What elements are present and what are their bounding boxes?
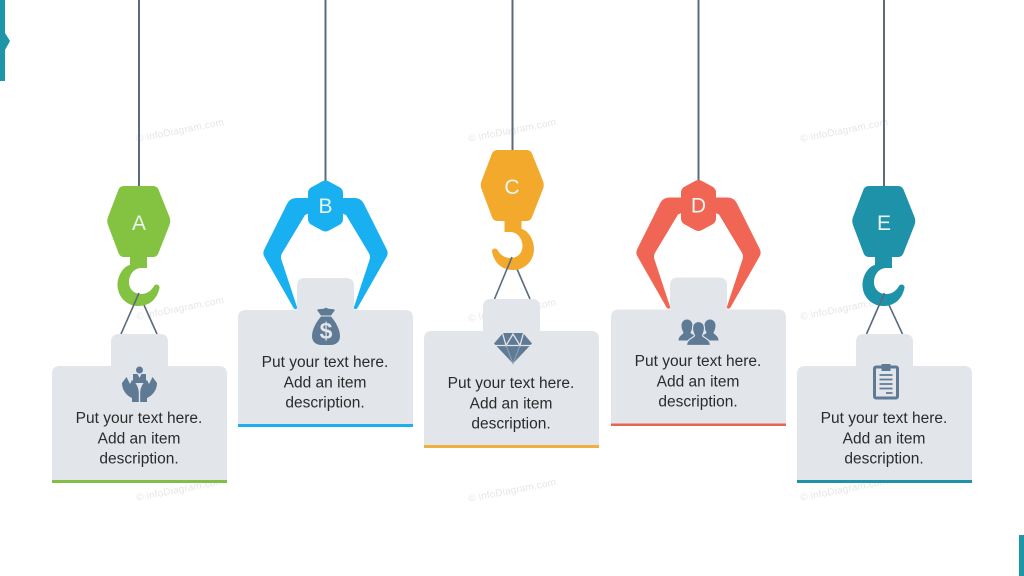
box E <box>797 334 972 483</box>
icon: money bag: $ <box>320 318 333 344</box>
watermarks: © infoDiagram.com <box>467 117 557 145</box>
watermarks: © infoDiagram.com <box>799 476 889 504</box>
icon: people group <box>678 320 718 346</box>
claw D <box>636 180 761 309</box>
rope A left <box>121 293 139 334</box>
rope C right <box>517 269 530 299</box>
cable E <box>883 0 885 187</box>
text B: Add an item <box>284 374 366 392</box>
rope C left <box>494 257 512 299</box>
text D <box>635 353 761 410</box>
letter B: B <box>318 195 333 218</box>
watermarks: © infoDiagram.com <box>467 297 557 325</box>
text B: description. <box>285 394 365 412</box>
cable D <box>698 0 700 182</box>
watermarks: © infoDiagram.com <box>135 117 225 145</box>
text A <box>76 410 202 468</box>
rope E left <box>866 293 884 334</box>
watermarks: © infoDiagram.com <box>799 117 889 145</box>
panel: E <box>797 0 972 483</box>
panel: D <box>611 0 786 426</box>
panel: C <box>424 0 599 448</box>
claw B <box>263 180 388 309</box>
text D: Put your text here. <box>635 353 761 370</box>
text C: description. <box>471 416 551 432</box>
text C: Put your text here. <box>448 375 574 392</box>
rope A right <box>144 305 157 334</box>
hook E <box>852 186 915 306</box>
text D: description. <box>658 394 738 410</box>
box A <box>52 334 227 483</box>
box B <box>238 278 413 427</box>
icon: money bag <box>312 308 340 345</box>
text C <box>448 375 574 432</box>
hook C <box>481 150 544 270</box>
watermarks: © infoDiagram.com <box>467 477 557 505</box>
hook A <box>107 186 170 306</box>
text A: description. <box>99 450 179 468</box>
text C: Add an item <box>470 396 552 412</box>
watermarks <box>135 117 889 505</box>
box C <box>424 299 599 448</box>
text E <box>821 410 947 468</box>
text A: Put your text here. <box>76 410 202 427</box>
text E: Put your text here. <box>821 410 947 427</box>
box D <box>611 278 786 426</box>
text E: Add an item <box>843 430 925 448</box>
icon: hands holding person <box>122 366 157 402</box>
text E: description. <box>844 450 924 468</box>
letter D: D <box>691 194 706 218</box>
text D: Add an item <box>657 374 739 390</box>
cable B <box>324 0 326 182</box>
text B <box>262 354 388 412</box>
accent: bottom right bar <box>1019 535 1024 576</box>
watermarks: © infoDiagram.com <box>135 476 225 504</box>
letter A: A <box>132 212 146 235</box>
accent: top left marker <box>0 0 10 81</box>
text A: Add an item <box>98 430 180 448</box>
cable A <box>138 0 140 187</box>
panel: A <box>52 0 227 483</box>
panel: B <box>238 0 413 427</box>
letter E: E <box>877 212 891 235</box>
icon: diamond <box>494 333 532 364</box>
watermarks: © infoDiagram.com <box>799 295 889 323</box>
text B: Put your text here. <box>262 354 388 371</box>
watermarks: © infoDiagram.com <box>135 295 225 323</box>
icon: clipboard <box>874 364 898 398</box>
rope E right <box>889 305 902 334</box>
letter C: C <box>504 176 520 199</box>
cable C <box>512 0 514 151</box>
